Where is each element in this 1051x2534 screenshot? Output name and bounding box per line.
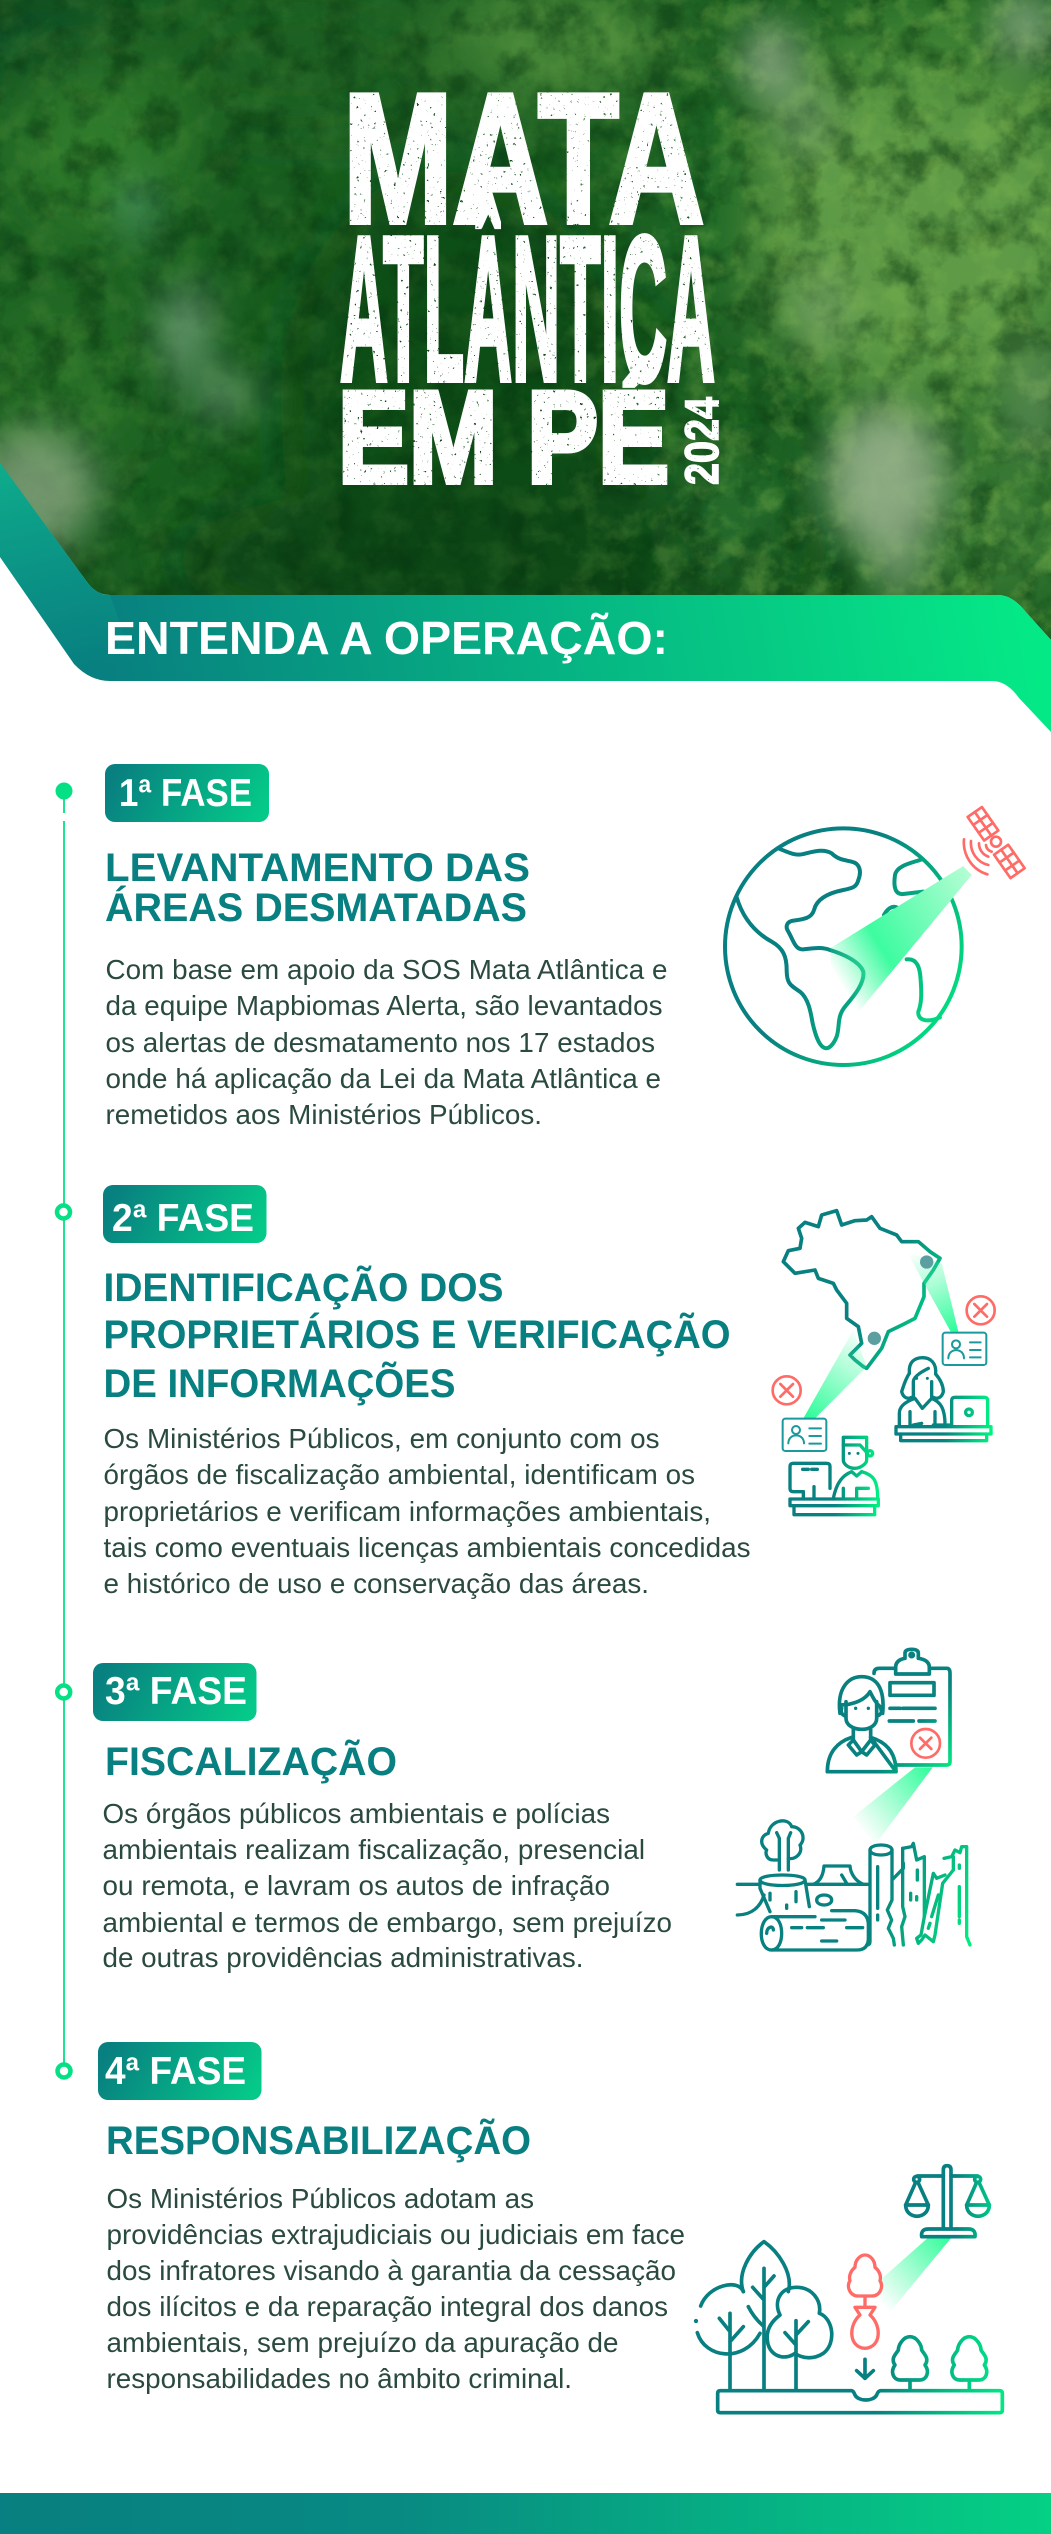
phase 3 [93,1649,970,1973]
header forest photo [0,0,1051,660]
text: phase 3 description [102,1798,672,1973]
badge: 2ª fase: 2ª FASE [112,1197,254,1240]
banner: entenda a operação: ENTENDA A OPERAÇÃO: [105,612,668,664]
text: phase 4 description [106,2183,685,2394]
icon: inspector and felled trees [737,1649,970,1950]
phase 2 [103,1185,995,1599]
heading: levantamento: ÁREAS DESMATADAS [105,885,527,930]
text: phase 1 description: os alertas de desmatamento nos 17 estados [106,1027,655,1058]
text: phase 1 description [106,954,668,1130]
text: phase 2 description: proprietários e verificam informações ambientais, [104,1496,711,1527]
text: phase 3 description: de outras providências administrativas. [102,1942,584,1973]
phase 4 [98,2042,1002,2413]
text: phase 1 description: da equipe Mapbiomas Alerta, são levantados [106,990,662,1021]
icon: globe and satellite [725,807,1025,1065]
text: phase 4 description: Os Ministérios Públicos adotam as [106,2183,534,2214]
text: phase 3 description: ambiental e termos de embargo, sem prejuízo [102,1907,672,1938]
heading: levantamento: LEVANTAMENTO DAS [105,846,530,890]
text: phase 3 description: ambientais realizam fiscalização, presencial [102,1834,645,1865]
heading: identificação: IDENTIFICAÇÃO DOS [104,1264,504,1310]
badge: 3ª fase: 3ª FASE [105,1670,247,1713]
badge: 1ª fase [105,764,269,822]
text: phase 2 description: e histórico de uso e conservação das áreas. [104,1568,649,1599]
text: phase 4 description: ambientais, sem prejuízo da apuração de [106,2327,618,2358]
heading: levantamento [105,846,530,930]
heading: identificação: DE INFORMAÇÕES [104,1360,456,1406]
text: phase 2 description: Os Ministérios Públicos, em conjunto com os [104,1423,660,1454]
text: phase 3 description: ou remota, e lavram os autos de infração [102,1870,610,1901]
heading: identificação [104,1264,730,1406]
title: Mata Atlântica em Pé 2024: EM PÉ [338,364,669,510]
footer band [0,2493,1051,2534]
text: phase 4 description: dos ilícitos e da reparação integral dos danos [106,2291,668,2322]
timeline [56,782,72,2078]
text: phase 1 description: remetidos aos Ministérios Públicos. [106,1099,542,1130]
text: phase 4 description: responsabilidades no âmbito criminal. [106,2363,572,2394]
heading: identificação: PROPRIETÁRIOS E VERIFICAÇÃO [104,1311,730,1357]
text: phase 1 description: onde há aplicação da Lei da Mata Atlântica e [106,1063,661,1094]
title: Mata Atlântica em Pé 2024: 2024 [675,397,728,485]
title: Mata Atlântica em Pé 2024 [338,55,728,510]
heading: fiscalização: FISCALIZAÇÃO [105,1738,397,1784]
text: phase 3 description: Os órgãos públicos ambientais e polícias [102,1798,610,1829]
text: phase 1 description: Com base em apoio da SOS Mata Atlântica e [106,954,668,985]
badge: 3ª fase [93,1663,256,1721]
icon: scales, trees and seedling [694,2166,1002,2413]
badge: 4ª fase [98,2042,262,2100]
heading: responsabilização: RESPONSABILIZAÇÃO [106,2117,531,2163]
text: phase 2 description [104,1423,750,1599]
badge: 1ª fase: 1ª FASE [119,772,252,815]
text: phase 2 description: tais como eventuais licenças ambientais concedidas [104,1532,750,1563]
text: phase 4 description: providências extrajudiciais ou judiciais em face [106,2219,685,2250]
icon: Brazil map and officers [773,1211,995,1515]
badge: 2ª fase [103,1185,266,1243]
text: phase 4 description: dos infratores visando à garantia da cessação [106,2255,676,2286]
badge: 4ª fase: 4ª FASE [105,2050,246,2093]
banner: entenda a operação [0,463,1051,732]
phase 1 [105,764,1025,1130]
title: Mata Atlântica em Pé 2024: MATA [343,55,704,261]
text: phase 2 description: órgãos de fiscalização ambiental, identificam os [104,1459,695,1490]
